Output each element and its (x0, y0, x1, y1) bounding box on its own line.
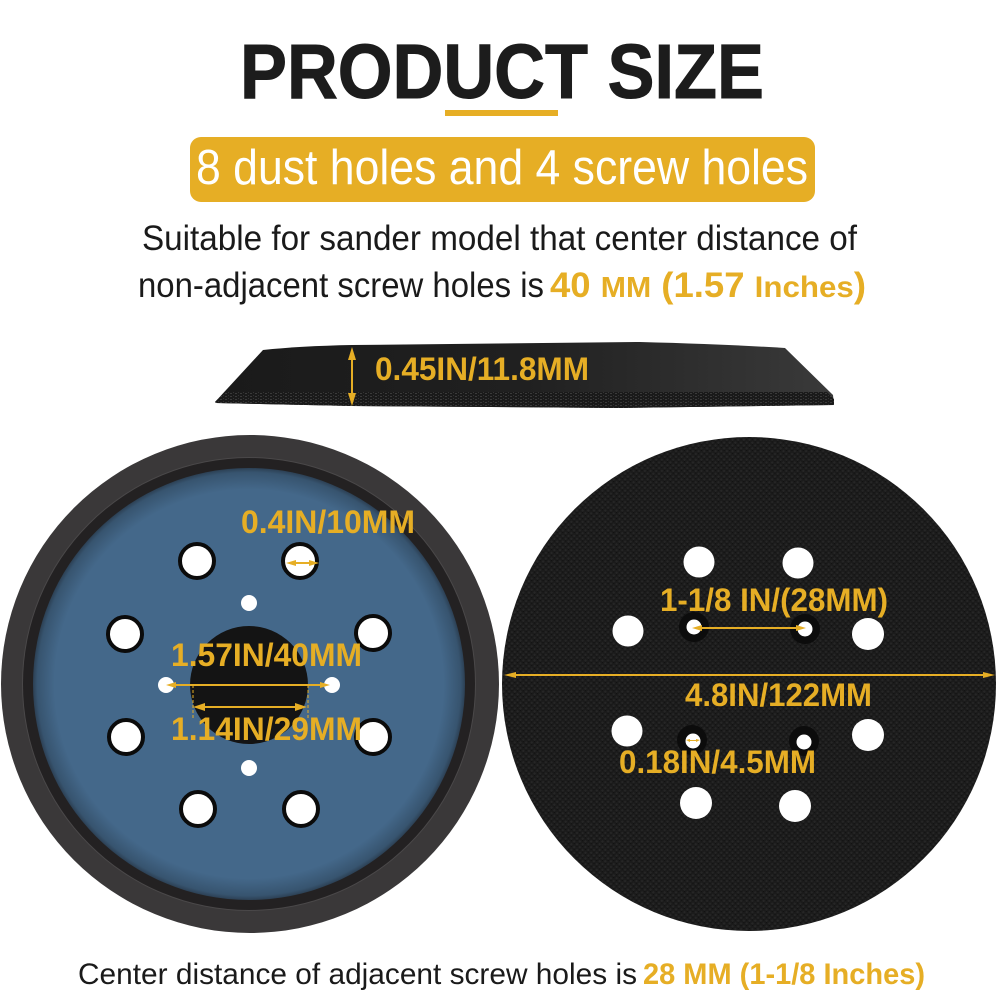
screw holes (158, 595, 340, 776)
footer note: 28 MM (1-1/8 Inches) (643, 958, 925, 991)
dimension: dust hole: 0.4IN/10MM (241, 504, 415, 540)
screw holes (677, 612, 820, 756)
description text: Suitable for sander model that center distance of (142, 219, 857, 258)
thickness label: 0.45IN/11.8MM (375, 351, 589, 387)
badge: 8 dust holes and 4 screw holes: 8 dust holes and 4 screw holes (196, 141, 808, 195)
title underline (445, 110, 558, 116)
description text (138, 219, 866, 305)
dimension: dust hole (241, 504, 415, 566)
dust holes (612, 546, 884, 822)
dust holes (108, 544, 390, 826)
side view of pad (215, 342, 834, 408)
title: PRODUCT SIZE (240, 29, 764, 115)
dimension: pad diameter (504, 672, 995, 713)
dimension: center hole: 1.14IN/29MM (171, 711, 362, 747)
dimension: adjacent screw holes: 1-1/8 IN/(28MM) (660, 582, 888, 618)
dimension: pad diameter: 4.8IN/122MM (685, 677, 872, 713)
footer note: Center distance of adjacent screw holes is (78, 958, 637, 991)
description text: 40 MM (1.57 Inches) (550, 266, 866, 305)
dimension: screw hole diameter: 0.18IN/4.5MM (619, 744, 816, 780)
thickness arrow (348, 347, 356, 406)
center hole (190, 626, 308, 744)
dimension: screw hole distance (166, 637, 362, 688)
dimension: center hole (171, 685, 362, 747)
description text: non-adjacent screw holes is (138, 266, 544, 305)
footer note (78, 958, 925, 991)
right pad: hook and loop face (502, 437, 996, 931)
left pad: blue face (1, 435, 499, 933)
dimension: screw hole distance: 1.57IN/40MM (171, 637, 362, 673)
textured bottom layer (215, 392, 834, 408)
